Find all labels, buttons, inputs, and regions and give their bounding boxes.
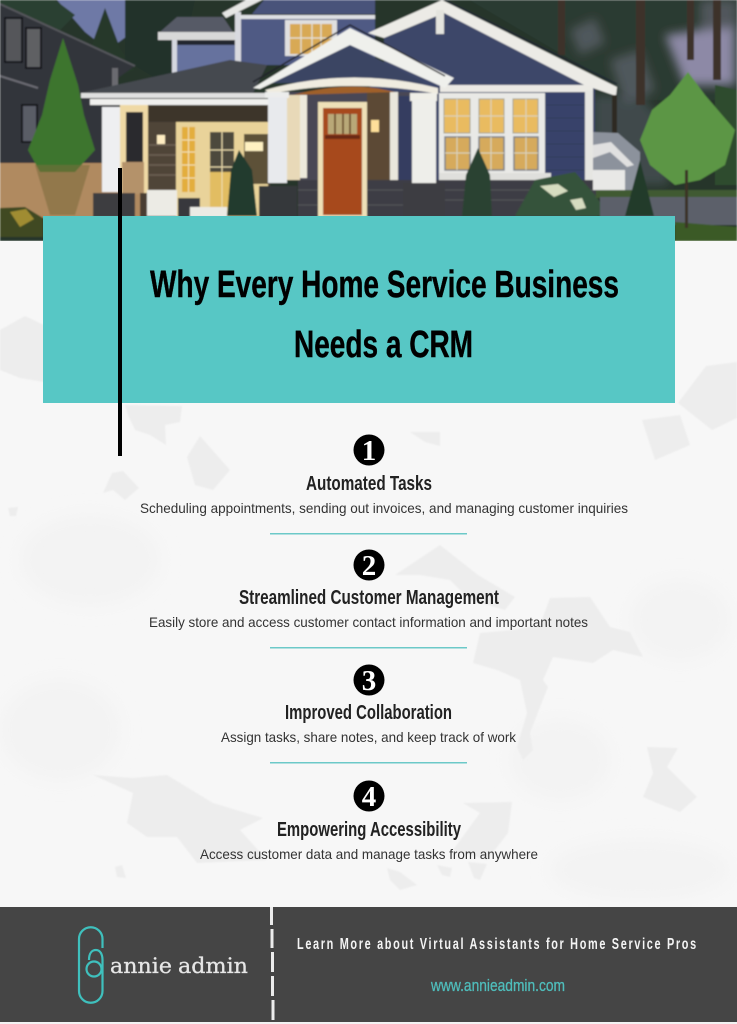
heading 3: Improved Collaboration (285, 701, 452, 724)
description 4: Access customer data and manage tasks from anywhere (200, 846, 538, 862)
item 4: empowering accessibility (200, 780, 538, 862)
right side trees, house and road (593, 72, 737, 241)
upper storey (222, 0, 375, 65)
right wing siding (370, 85, 595, 185)
left neighbour house (0, 4, 135, 165)
number badge 3: 3 (362, 665, 376, 697)
porch roof (80, 60, 267, 93)
left porch column (93, 107, 135, 217)
number badge 1 (354, 434, 384, 467)
description 3: Assign tasks, share notes, and keep track of work (221, 729, 517, 745)
upper gable (368, 0, 617, 96)
number badge 4: 4 (362, 781, 376, 813)
left garden tree (0, 38, 95, 237)
number badge 2 (354, 550, 384, 582)
item 3: improved collaboration (221, 664, 517, 745)
logo wordmark (110, 954, 248, 978)
wooden fence (0, 163, 145, 218)
shrub by porch (227, 150, 257, 216)
title: Needs a CRM (294, 324, 473, 366)
heading 2: Streamlined Customer Management (239, 586, 499, 609)
footer website: www.annieadmin.com (430, 976, 565, 995)
footer call to action: Learn More about Virtual Assistants for Home Service Pros (297, 935, 696, 953)
number badge 1: 1 (362, 435, 376, 467)
heading 4: Empowering Accessibility (277, 818, 461, 841)
photo: house at dusk (0, 0, 737, 241)
logo: paperclip mark (79, 927, 102, 1003)
back dormer (158, 17, 236, 74)
number badge 3 (354, 664, 384, 697)
logo wordmark: admin (178, 954, 248, 978)
item 2: streamlined customer management (149, 550, 588, 630)
porch beam (81, 93, 268, 105)
front gable (253, 25, 454, 95)
footer band (0, 907, 737, 1024)
number badge 4 (354, 780, 384, 813)
front door (318, 102, 367, 217)
item 1: automated tasks (140, 434, 628, 516)
stone base (298, 180, 597, 217)
dashed divider (270, 907, 274, 1020)
description 2: Easily store and access customer contact information and important notes (149, 614, 588, 630)
number badge 2: 2 (362, 550, 376, 582)
heading 1: Automated Tasks (306, 472, 432, 495)
wing trim and windows (439, 85, 593, 180)
description 1: Scheduling appointments, sending out invoices, and managing customer inquiries (140, 500, 628, 516)
porch chairs (140, 190, 227, 217)
entry wall (287, 92, 412, 180)
logo wordmark: annie (110, 954, 172, 978)
sky and trees (0, 0, 737, 241)
vertical accent line (118, 168, 122, 456)
title (150, 264, 619, 366)
title panel (43, 216, 675, 403)
shrubs at wing (462, 148, 610, 216)
right porch column (259, 92, 445, 217)
porch wall (120, 105, 270, 217)
